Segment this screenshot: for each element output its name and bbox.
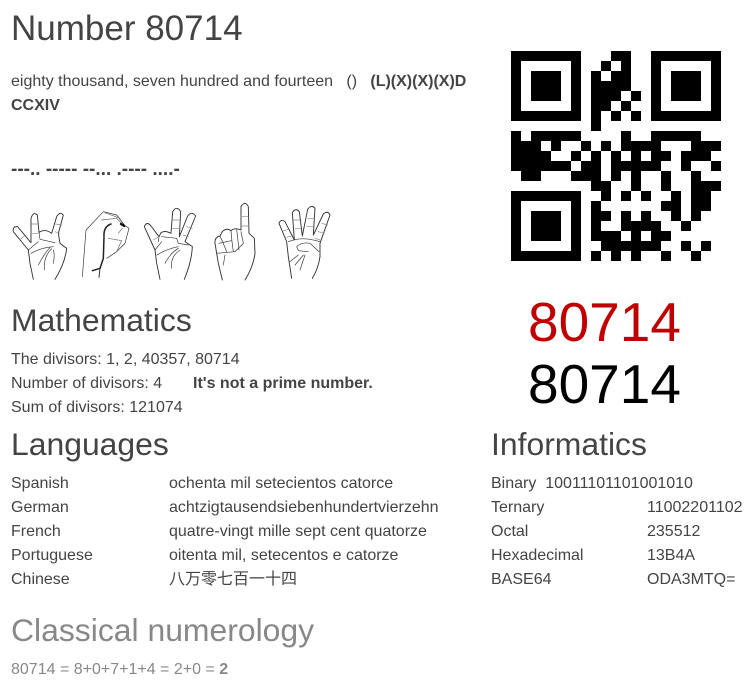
text: sum of divisors: Sum of divisors: 121074 — [11, 399, 183, 416]
big number red: 80714 — [528, 291, 681, 353]
QR code — [511, 51, 721, 261]
row: portuguese: oitenta mil, setecentos e catorze — [169, 547, 398, 564]
row: french — [11, 523, 427, 540]
row: ternary — [491, 499, 743, 516]
row: octal: 235512 — [647, 523, 700, 540]
icon: hand digit 1 — [215, 203, 255, 280]
panel: mathematics — [11, 302, 373, 416]
text: number in words and roman numeral: eighty thousand, seven hundred and fourteen () (L)(X)(X)(X)D — [11, 73, 466, 90]
row: ternary: Ternary — [491, 499, 544, 516]
icon: hand digit 8 — [13, 213, 67, 279]
row: chinese: 八万零七百一十四 — [169, 571, 297, 588]
heading: classical numerology: Classical numerology — [11, 612, 314, 648]
row: portuguese: Portuguese — [11, 547, 93, 564]
row: hexadecimal: Hexadecimal — [491, 547, 583, 564]
panel: informatics — [491, 426, 743, 588]
row: french: quatre-vingt mille sept cent quatorze — [169, 523, 427, 540]
heading: mathematics: Mathematics — [11, 302, 192, 338]
row: base64 — [491, 571, 735, 588]
text: prime status: It's not a prime number. — [193, 375, 373, 392]
text: numerology sum: 80714 = 8+0+7+1+4 = 2+0 = 2 — [11, 661, 228, 678]
text: morse code: ---.. ----- --... .---- ....- — [11, 159, 180, 180]
panel: languages — [11, 426, 439, 588]
text: divisors: The divisors: 1, 2, 40357, 80714 — [11, 351, 240, 368]
heading: languages: Languages — [11, 426, 169, 462]
row: binary: Binary 10011101101001010 — [491, 475, 693, 492]
row: german — [11, 499, 439, 516]
row: french: French — [11, 523, 61, 540]
text: number in words and roman numeral: CCXIV — [11, 97, 60, 114]
text: number of divisors: Number of divisors: 4 — [11, 375, 162, 392]
row: octal — [491, 523, 700, 540]
icon: hand digit 4 — [279, 206, 330, 278]
row: hexadecimal — [491, 547, 695, 564]
icon: hand digit 0 — [82, 212, 129, 277]
row: spanish: ochenta mil setecientos catorce — [169, 475, 393, 492]
row: ternary: 11002201102 — [647, 499, 743, 516]
icon: hand digit 7 — [144, 208, 196, 279]
row: chinese — [11, 570, 297, 588]
title: Number 80714 — [11, 9, 243, 48]
row: spanish: Spanish — [11, 475, 69, 492]
row: base64: ODA3MTQ= — [647, 571, 735, 588]
heading: informatics: Informatics — [491, 426, 647, 462]
row: base64: BASE64 — [491, 571, 551, 588]
row: hexadecimal: 13B4A — [647, 547, 695, 564]
row: spanish — [11, 475, 393, 492]
row: german: achtzigtausendsiebenhundertvierzehn — [169, 499, 439, 516]
icon: sign language hands — [12, 202, 330, 280]
row: octal: Octal — [491, 523, 528, 540]
row: chinese: Chinese — [11, 571, 70, 588]
big number black: 80714 — [528, 353, 681, 415]
row: portuguese — [11, 547, 398, 564]
row: german: German — [11, 499, 69, 516]
text: number in words and roman numeral — [11, 73, 466, 114]
